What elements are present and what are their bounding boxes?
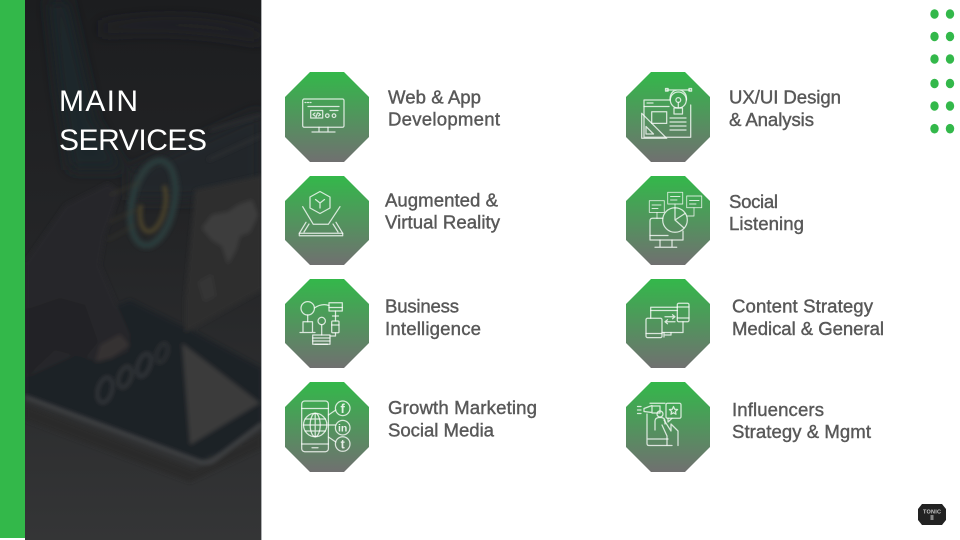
icon letters: social networks: f	[341, 401, 346, 416]
label: Development	[388, 109, 501, 130]
logo: Tonic badge: TONIC	[923, 510, 941, 516]
icon letters: social networks: t	[341, 438, 346, 452]
service: Growth Marketing Social Media	[285, 382, 537, 472]
shadow under tablet	[102, 441, 257, 480]
service: Content Strategy Medical & General	[626, 279, 884, 368]
label: Intelligence	[385, 318, 481, 339]
tablet lit wedge	[182, 343, 260, 445]
title: MAIN	[59, 85, 138, 118]
label: UX/UI Design	[729, 86, 841, 108]
service: Business Intelligence	[285, 279, 481, 368]
service: Influencers Strategy & Mgmt	[626, 382, 872, 472]
icon: phone with megaphone and star	[638, 403, 681, 446]
icon: window, bulb and set square	[642, 88, 692, 138]
label: Augmented &	[385, 190, 499, 211]
service: Social Listening	[626, 176, 804, 265]
label: Medical & General	[732, 318, 884, 339]
decorative dot grid	[930, 9, 954, 134]
label: Content Strategy	[732, 296, 874, 317]
icon: monitor with pie chart and notes	[649, 192, 702, 247]
service: UX/UI Design & Analysis	[626, 72, 841, 162]
title	[59, 85, 207, 157]
label: Growth Marketing	[388, 397, 537, 418]
label: Web & App	[388, 86, 481, 108]
label: Strategy & Mgmt	[732, 421, 872, 442]
dial ring	[124, 157, 182, 249]
icon: holographic cube on tablet	[299, 192, 343, 236]
icon: bulb with connected devices	[300, 302, 342, 344]
icon letters: social networks	[338, 401, 347, 452]
service: Web & App Development	[285, 72, 501, 162]
label: Social	[729, 191, 778, 212]
screen rings	[95, 376, 115, 404]
label: Social Media	[388, 420, 495, 441]
label: & Analysis	[729, 109, 814, 130]
icon: connected devices	[646, 303, 689, 338]
title: SERVICES	[59, 124, 207, 157]
icon letters: social networks: in	[338, 422, 347, 434]
map panel	[185, 175, 262, 333]
label: Business	[385, 296, 459, 317]
icon: monitor with code	[303, 99, 344, 132]
green sidebar strip	[0, 0, 25, 538]
label: Listening	[729, 213, 804, 234]
logo: Tonic badge	[918, 504, 946, 525]
service: Augmented & Virtual Reality	[285, 176, 501, 265]
tablet screen	[25, 300, 262, 462]
label: Influencers	[732, 399, 824, 420]
label: Virtual Reality	[385, 212, 501, 233]
icon: phone with globe and social badges	[302, 401, 350, 452]
hand	[34, 190, 128, 372]
tablet rim	[25, 397, 262, 463]
panel: dark photo background	[25, 0, 262, 540]
